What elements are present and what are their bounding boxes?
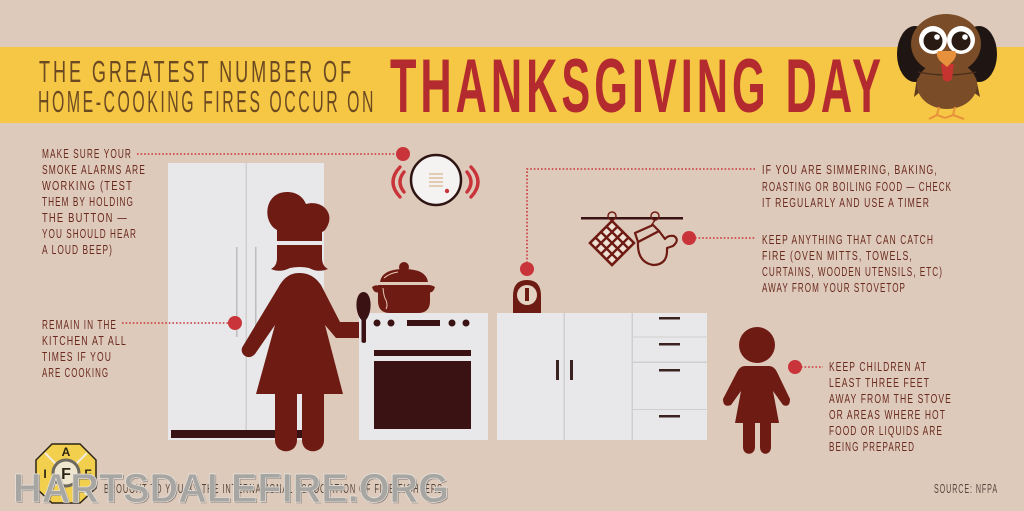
callout: keep flammables away: FIRE (OVEN MITTS, TOWELS, xyxy=(762,249,913,263)
figure: woman cook with spoon xyxy=(242,192,371,451)
callout: keep children away: BEING PREPARED xyxy=(829,440,915,454)
callout: keep children away: AWAY FROM THE STOVE xyxy=(829,392,952,406)
icon: IAFF logo: F xyxy=(84,467,92,481)
callout: smoke alarms: SMOKE ALARMS ARE xyxy=(42,163,146,177)
stove xyxy=(359,313,488,440)
watermark: HARTSDALEFIRE.ORG xyxy=(13,465,449,511)
callout: smoke alarms xyxy=(42,147,410,257)
callout: smoke alarms: WORKING (TEST xyxy=(42,179,133,193)
callout: smoke alarms: MAKE SURE YOUR xyxy=(42,147,132,161)
title: THE GREATEST NUMBER OF xyxy=(39,54,354,89)
figure: child xyxy=(723,327,790,454)
title xyxy=(38,44,885,129)
callout: keep children away: FOOD OR LIQUIDS ARE xyxy=(829,424,943,438)
callout: use a timer xyxy=(520,163,952,276)
callout: remain in kitchen: TIMES IF YOU xyxy=(42,350,112,364)
callout: remain in kitchen: REMAIN IN THE xyxy=(42,318,117,332)
icon: IAFF logo: F xyxy=(61,466,71,483)
callout: keep flammables away: KEEP ANYTHING THAT CAN CATCH xyxy=(762,233,934,247)
watermark: HARTSDALEFIRE.ORG xyxy=(14,466,450,511)
icon: turkey xyxy=(897,14,997,119)
callout: remain in kitchen: ARE COOKING xyxy=(42,366,109,380)
callout: remain in kitchen xyxy=(42,316,242,380)
callout: keep children away: LEAST THREE FEET xyxy=(829,376,930,390)
icon: cooking pot xyxy=(372,262,435,313)
callout: smoke alarms: THE BUTTON — xyxy=(42,211,128,225)
smoke alarm with sound waves xyxy=(393,155,478,205)
icon: kitchen timer xyxy=(513,280,541,313)
spoon xyxy=(356,292,371,343)
cabinet xyxy=(497,313,707,440)
chef hat xyxy=(267,192,329,241)
footer credit: BROUGHT TO YOU BY THE INTERNATIONAL ASSOCIATION OF FIRE FIGHTERS xyxy=(104,482,443,496)
callout: smoke alarms: A LOUD BEEP) xyxy=(42,243,113,257)
callout: remain in kitchen: KITCHEN AT ALL xyxy=(42,334,127,348)
callout: use a timer: IF YOU ARE SIMMERING, BAKING, xyxy=(762,163,938,177)
callout: keep flammables away: AWAY FROM YOUR STOVETOP xyxy=(762,281,906,295)
icon: IAFF logo: A xyxy=(62,445,71,459)
callout: smoke alarms: THEM BY HOLDING xyxy=(42,195,134,209)
callout: smoke alarms: YOU SHOULD HEAR xyxy=(42,227,137,241)
hair xyxy=(271,245,328,271)
callout: keep flammables away xyxy=(682,231,943,295)
callout: use a timer: IT REGULARLY AND USE A TIMER xyxy=(762,196,930,210)
callout: keep children away xyxy=(788,360,952,454)
title: HOME-COOKING FIRES OCCUR ON xyxy=(38,84,376,119)
fridge xyxy=(168,163,324,440)
icon: pot holder and oven mitt on rail xyxy=(581,212,683,265)
callout: keep children away: OR AREAS WHERE HOT xyxy=(829,408,946,422)
icon: IAFF logo xyxy=(36,444,96,503)
yellow title banner xyxy=(0,47,1024,123)
icon: IAFF logo: I xyxy=(43,467,47,481)
callout: keep children away: KEEP CHILDREN AT xyxy=(829,360,927,374)
dress and legs xyxy=(242,273,359,451)
